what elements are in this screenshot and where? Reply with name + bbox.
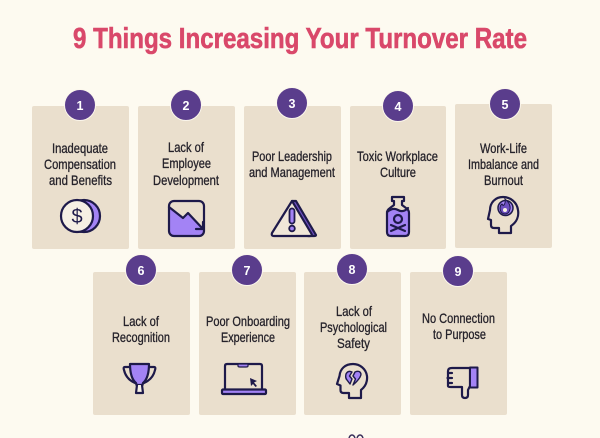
- icon: trophy: [124, 364, 155, 393]
- text: inadequate compensation and benefits: Inadequate: [52, 140, 108, 156]
- text: toxic workplace culture: [357, 148, 438, 180]
- icon: declining chart: [169, 201, 204, 236]
- number badge 1: [64, 90, 96, 120]
- number badge 5: 5: [502, 98, 509, 112]
- text: poor onboarding experience: [206, 313, 290, 345]
- number badge 7: 7: [244, 264, 251, 278]
- number badge 4: [382, 90, 414, 122]
- text: poor onboarding experience: Poor Onboarding: [206, 313, 290, 329]
- text: lack of psychological safety: Lack of: [336, 303, 372, 319]
- number badge 8: 8: [349, 263, 356, 277]
- text: work-life imbalance and burnout: Burnout: [484, 172, 523, 188]
- icon: head with flame: [488, 197, 518, 233]
- number badge 1: 1: [77, 99, 84, 113]
- panel: burnout: [455, 88, 552, 248]
- text: no connection to purpose: No Connection: [422, 310, 495, 326]
- text: lack of psychological safety: Safety: [337, 335, 370, 351]
- icon: warning triangle: [272, 201, 316, 236]
- text: poor leadership and management: and Management: [249, 164, 335, 180]
- text: work-life imbalance and burnout: Imbalance and: [468, 156, 539, 172]
- icon: head with broken heart: [337, 364, 367, 398]
- icon: coin: $: [71, 206, 83, 228]
- text: work-life imbalance and burnout: Work-Life: [480, 140, 527, 156]
- text: poor leadership and management: Poor Leadership: [252, 148, 332, 164]
- text: poor leadership and management: [249, 148, 335, 180]
- cropped mark at bottom edge: [349, 435, 363, 438]
- panel: inadequate compensation: [32, 90, 129, 249]
- number badge 9: [442, 256, 474, 286]
- text: lack of recognition: [112, 313, 170, 345]
- number badge 4: 4: [395, 100, 402, 114]
- icon: thumbs down: [448, 368, 478, 398]
- panel: onboarding: [199, 254, 296, 415]
- icon: coin: [61, 200, 100, 232]
- panel: employee development: [138, 90, 235, 249]
- text: poor onboarding experience: Experience: [221, 329, 275, 345]
- text: lack of employee development: Lack of: [168, 139, 204, 155]
- icon: laptop with cursor: [222, 364, 266, 394]
- text: toxic workplace culture: Culture: [380, 164, 416, 180]
- number badge 8: [336, 254, 368, 284]
- text: lack of employee development: Employee: [162, 155, 211, 171]
- text: lack of psychological safety: [320, 303, 387, 351]
- panel: recognition: [93, 254, 190, 415]
- panel: poor leadership: [244, 88, 341, 249]
- number badge 7: [232, 254, 262, 286]
- icon: poison bottle: [387, 197, 409, 236]
- number badge 5: [490, 88, 520, 120]
- number badge 6: 6: [138, 264, 145, 278]
- text: lack of recognition: Recognition: [112, 329, 170, 345]
- text: inadequate compensation and benefits: [44, 140, 116, 188]
- number badge 3: 3: [289, 97, 296, 111]
- panel: toxic culture: [350, 90, 446, 249]
- text: lack of employee development: [153, 139, 219, 188]
- text: work-life imbalance and burnout: [468, 140, 539, 188]
- number badge 3: [276, 88, 308, 118]
- text: inadequate compensation and benefits: Compensation: [44, 156, 116, 172]
- number badge 2: 2: [183, 99, 190, 113]
- panel: purpose: [410, 256, 507, 415]
- text: inadequate compensation and benefits: and Benefits: [49, 172, 112, 188]
- text: no connection to purpose: to Purpose: [433, 326, 486, 342]
- text: lack of recognition: Lack of: [123, 313, 159, 329]
- text: toxic workplace culture: Toxic Workplace: [357, 148, 438, 164]
- number badge 9: 9: [455, 265, 462, 279]
- number badge 2: [170, 90, 202, 120]
- text: lack of psychological safety: Psychological: [320, 319, 387, 335]
- text: lack of employee development: Development: [153, 172, 219, 188]
- panel: psychological safety: [304, 254, 401, 415]
- number badge 6: [126, 254, 156, 286]
- text: no connection to purpose: [422, 310, 495, 342]
